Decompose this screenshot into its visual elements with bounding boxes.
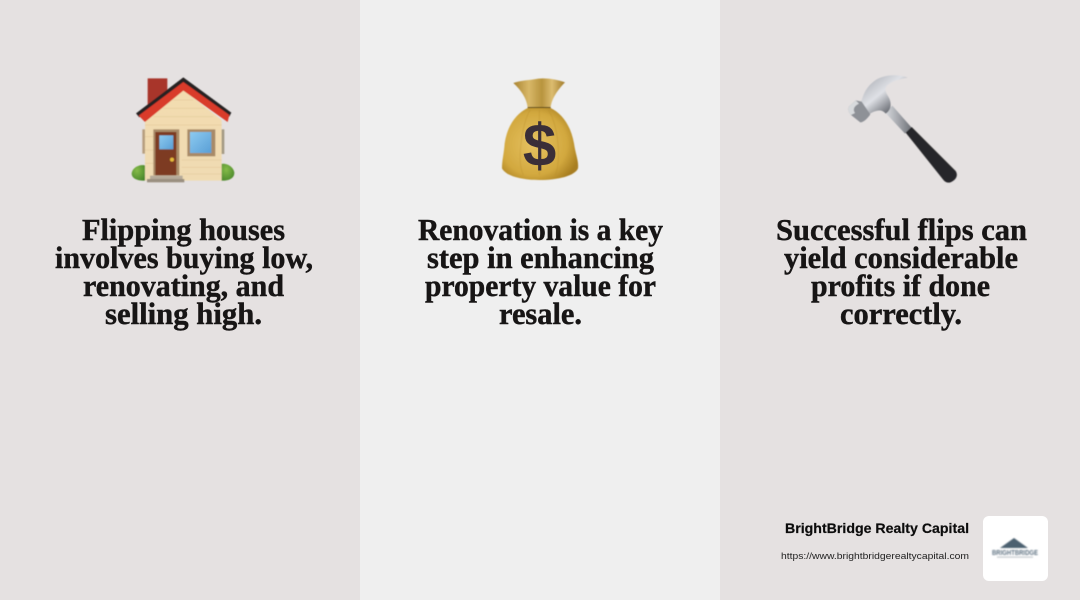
panel: profits — [720, 0, 1080, 600]
logo mark: BRIGHTBRIDGE — [992, 548, 1038, 557]
footer brand name: BrightBridge Realty Capital — [785, 520, 969, 536]
heading: renovation: step in enhancing — [427, 240, 654, 275]
icon: hammer — [848, 75, 957, 183]
footer url: https://www.brightbridgerealtycapital.com — [781, 551, 969, 562]
dollar sign: $ — [523, 112, 556, 179]
heading: renovation: resale. — [499, 296, 582, 331]
panel: buying low — [0, 0, 360, 600]
heading: renovation: property value for — [425, 268, 656, 303]
logo card — [983, 516, 1048, 581]
heading: profits: correctly. — [840, 296, 962, 331]
heading: buying low: Flipping houses — [82, 212, 285, 247]
heading: renovation — [418, 212, 663, 331]
heading: buying low — [55, 212, 313, 331]
icon: house — [132, 77, 234, 182]
heading: profits: Successful flips can — [776, 212, 1027, 247]
heading: buying low: selling high. — [105, 296, 262, 331]
heading: renovation: Renovation is a key — [418, 212, 663, 247]
heading: buying low: renovating, and — [83, 268, 284, 303]
heading: profits: profits if done — [811, 268, 990, 303]
heading: buying low: involves buying low, — [55, 240, 313, 275]
icon: money bag — [502, 78, 578, 180]
heading: profits: yield considerable — [784, 240, 1018, 275]
panel: renovation — [360, 0, 720, 600]
heading: profits — [776, 212, 1027, 331]
